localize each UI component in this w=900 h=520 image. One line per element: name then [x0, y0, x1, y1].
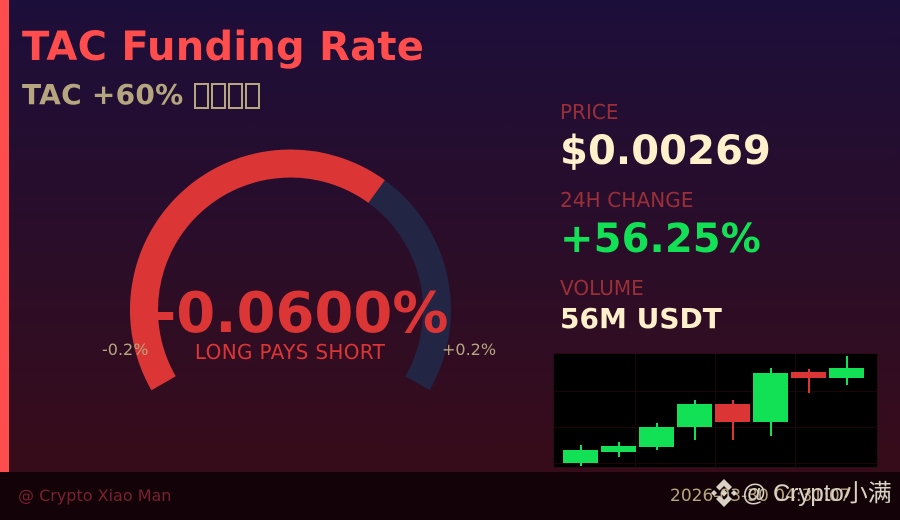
candlestick chart	[553, 353, 878, 468]
funding rate gauge	[130, 150, 451, 390]
title: TAC Funding Rate	[22, 24, 424, 70]
subtitle: TAC +60%	[22, 78, 183, 111]
footer timestamp: 2026-03-30 04:31:07	[670, 486, 851, 506]
accent bar	[0, 0, 9, 472]
candle 1	[563, 445, 598, 466]
candle 3	[639, 423, 674, 450]
24h change label: 24H CHANGE	[560, 188, 694, 212]
24h change value: +56.25%	[560, 216, 761, 262]
gauge track	[144, 164, 437, 383]
volume value: 56M USDT	[560, 302, 722, 335]
price label: PRICE	[560, 100, 618, 124]
funding rate value: -0.0600%	[153, 281, 448, 346]
candle 6	[753, 368, 788, 436]
footer credit: @ Crypto Xiao Man	[18, 486, 171, 505]
volume label: VOLUME	[560, 276, 644, 300]
gauge value arc	[144, 164, 377, 383]
gauge minimum label: -0.2%	[102, 340, 148, 359]
candle 8	[829, 356, 864, 385]
candle 7	[791, 369, 826, 393]
footer bar	[0, 472, 900, 520]
price value: $0.00269	[560, 128, 771, 174]
subtitle	[22, 78, 260, 111]
funding direction label: LONG PAYS SHORT	[195, 340, 385, 364]
candle 2	[601, 442, 636, 457]
candle 4	[677, 400, 712, 440]
candle 5	[715, 400, 750, 440]
watermark text: @ Crypto小满	[742, 480, 892, 507]
gauge maximum label: +0.2%	[442, 340, 496, 359]
watermark logo	[711, 479, 737, 507]
